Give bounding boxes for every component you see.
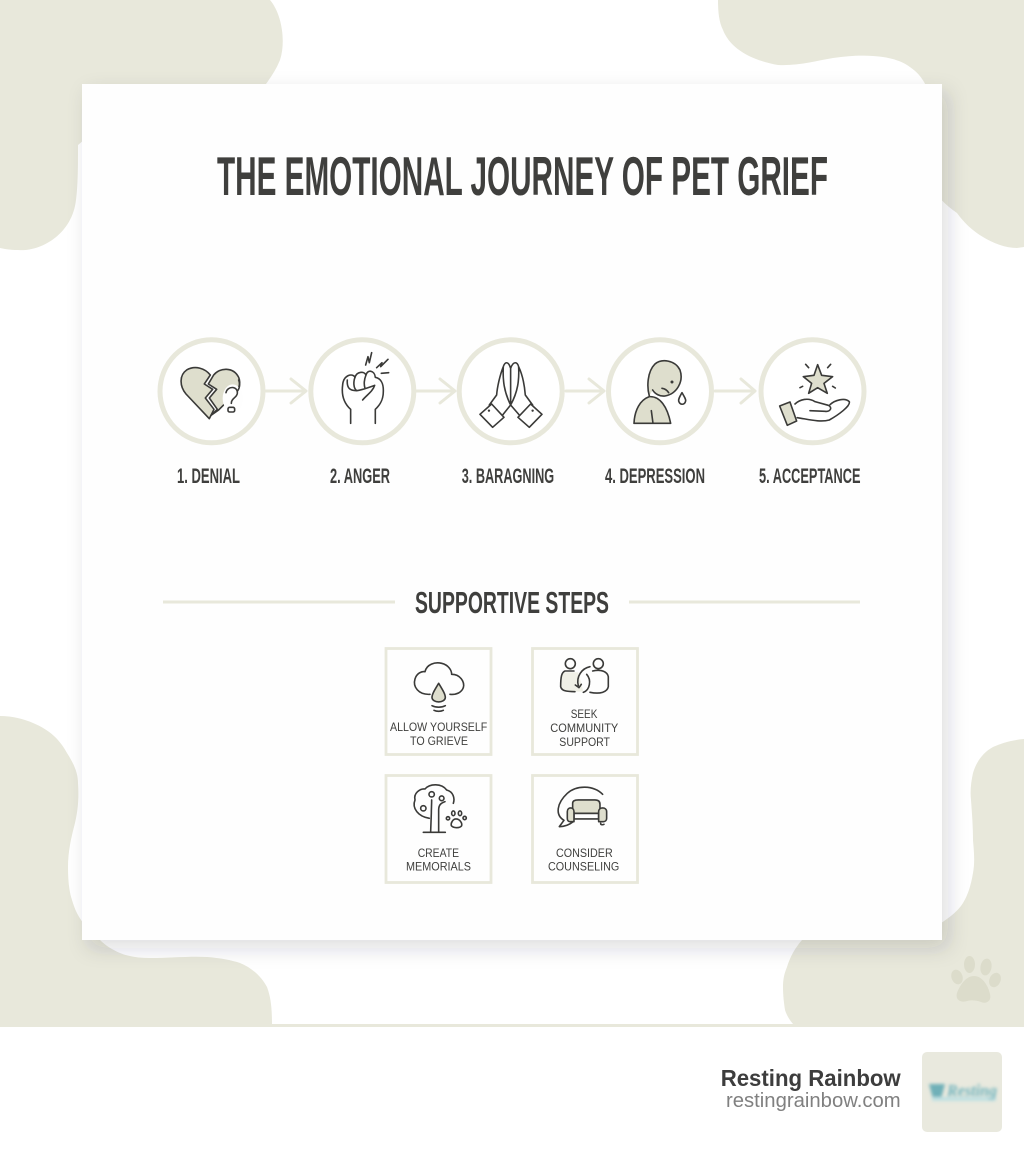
step card: consider counseling: CONSIDER [556, 848, 613, 860]
step card: allow yourself to grieve: ALLOW YOURSELF [390, 722, 487, 734]
footer divider [0, 1024, 1024, 1027]
blob: bottom right [783, 739, 1024, 1026]
arrow: denial to anger [266, 379, 306, 403]
step card: allow yourself to grieve: TO GRIEVE [410, 736, 468, 748]
stage label: 2. ANGER [330, 465, 390, 488]
stage label: 1. DENIAL [177, 465, 240, 488]
blob: top left [0, 0, 283, 250]
step card: seek community support: COMMUNITY [550, 723, 619, 735]
stage 1: denial [160, 340, 263, 488]
brand name: Resting Rainbow [721, 1065, 901, 1091]
blob: top right [718, 0, 1024, 248]
section heading: supportive steps: SUPPORTIVE STEPS [415, 585, 609, 620]
brand url: restingrainbow.com [726, 1090, 901, 1112]
grief stages row [160, 340, 864, 488]
blob: bottom left [0, 716, 272, 1026]
arrow: depression to acceptance [715, 379, 755, 403]
stage label: 3. BARAGNING [462, 465, 554, 488]
stage label: 5. ACCEPTANCE [759, 465, 860, 488]
main card [82, 84, 942, 940]
step card: consider counseling [532, 776, 638, 882]
stage 5: acceptance [759, 340, 864, 488]
step card: create memorials: MEMORIALS [406, 862, 471, 874]
brand logo [922, 1052, 1002, 1132]
stage 4: depression [605, 340, 712, 488]
step card: create memorials [386, 776, 491, 882]
step card: create memorials: CREATE [418, 848, 459, 860]
arrow: bargaining to depression [566, 379, 604, 403]
step card: allow yourself to grieve [386, 648, 491, 754]
footer [0, 1027, 1024, 1154]
stage 2: anger [311, 340, 414, 488]
step card: seek community support: SUPPORT [559, 737, 610, 749]
step card: consider counseling: COUNSELING [548, 862, 619, 874]
step card: seek community support [532, 648, 638, 754]
stage label: 4. DEPRESSION [605, 465, 705, 488]
icon: paw print [949, 956, 1003, 1003]
brand logo: Resting [946, 1081, 997, 1100]
step card: seek community support: SEEK [571, 709, 598, 721]
stage 3: bargaining [459, 340, 562, 488]
arrow: anger to bargaining [416, 379, 455, 403]
